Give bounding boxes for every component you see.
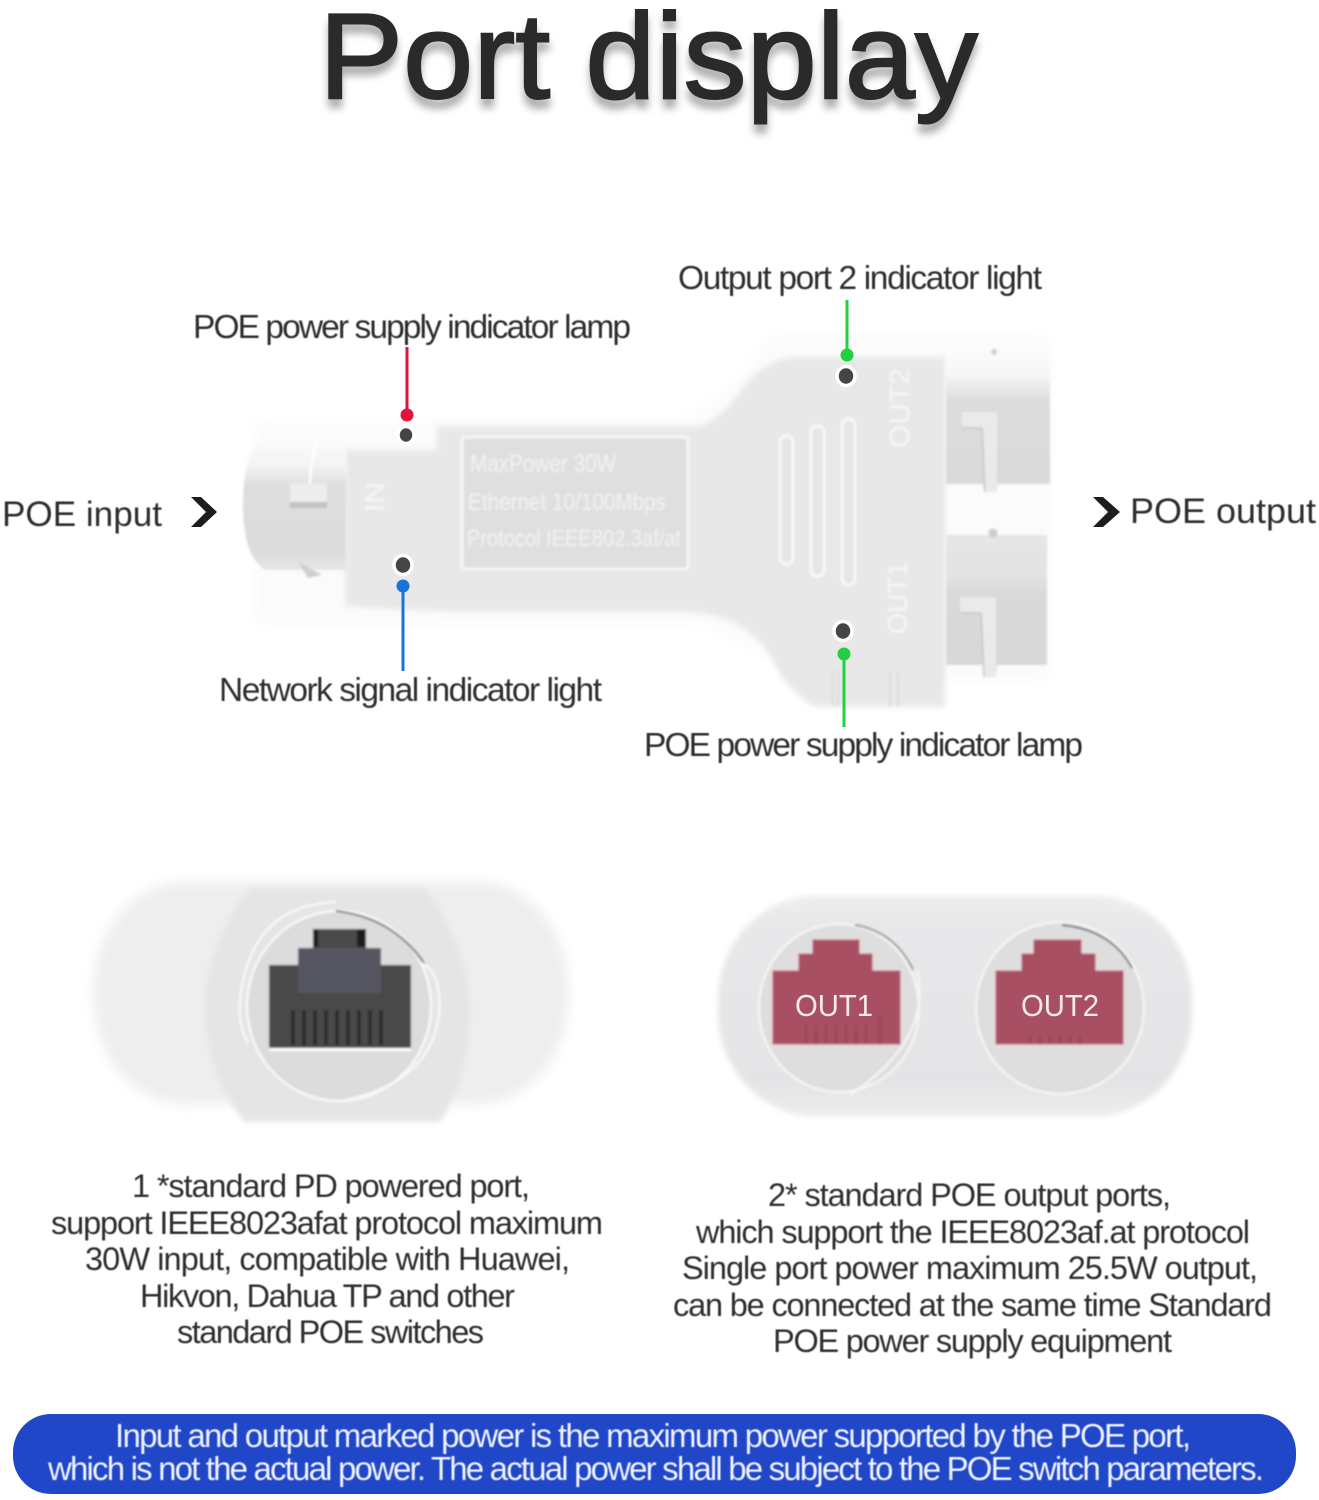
text block: input port description: Hikvon, Dahua TP and other — [140, 1278, 515, 1314]
text block: input port description — [51, 1168, 603, 1350]
OUT2 socket — [995, 939, 1124, 1045]
callout banner — [13, 1414, 1296, 1494]
connector clips — [962, 412, 997, 492]
arrow: input — [191, 497, 217, 527]
pointer: output port 2 light (green) — [840, 300, 854, 362]
label plate — [462, 437, 688, 569]
text block: input port description: 30W input, compatible with Huawei, — [85, 1241, 570, 1277]
rings — [759, 924, 919, 1092]
label: POE input: POE input — [2, 495, 162, 534]
plug clip — [290, 438, 327, 578]
left plug — [243, 438, 346, 570]
housing — [718, 895, 1192, 1117]
OUT1 label: OUT1 — [795, 988, 873, 1023]
device: PoE splitter top view — [243, 335, 1050, 707]
ring — [247, 911, 431, 1101]
text block: output ports description: Single port power maximum 25.5W output, — [682, 1250, 1258, 1286]
callout banner: which is not the actual power. The actual power shall be subject to the POE switch parameters. — [47, 1450, 1264, 1487]
callout banner: Input and output marked power is the maximum power supported by the POE port, — [115, 1417, 1191, 1454]
soft halo — [255, 335, 1050, 680]
text block: input port description: standard POE switches — [177, 1314, 484, 1350]
label plate: Protocol IEEE802.3af/at — [467, 525, 682, 551]
indicator LEDs — [394, 366, 855, 640]
label plate: MaxPower 30W — [470, 450, 616, 478]
connector dots — [988, 349, 998, 538]
pointer: network signal light (blue) — [396, 580, 410, 671]
label: network signal indicator light: Network signal indicator light — [219, 672, 603, 709]
label: POE output: POE output — [1130, 492, 1316, 531]
text block: output ports description: POE power supply equipment — [773, 1323, 1172, 1359]
front cap — [205, 888, 470, 1122]
label: output port 2 indicator light: Output port 2 indicator light — [678, 260, 1043, 297]
pointer: POE lamp output (green) — [838, 648, 850, 727]
ribs — [780, 419, 855, 585]
port marks: IN — [359, 482, 390, 512]
label: POE power supply indicator lamp (top): POE power supply indicator lamp — [193, 309, 631, 346]
main body — [345, 357, 945, 707]
text block: output ports description: can be connected at the same time Standard — [673, 1287, 1272, 1323]
label plate: Ethernet 10/100Mbps — [468, 489, 666, 516]
text block: input port description: 1 *standard PD powered port, — [132, 1168, 530, 1204]
rear housing — [94, 882, 568, 1104]
OUT1 socket — [772, 939, 901, 1045]
output ports end view — [718, 895, 1192, 1117]
bottom connector — [946, 535, 1047, 677]
port marks — [359, 368, 915, 634]
port marks: OUT2 — [884, 368, 915, 448]
text block: output ports description — [673, 1177, 1272, 1359]
text block: output ports description: which support the IEEE8023af.at protocol — [695, 1214, 1250, 1250]
input port end view — [94, 882, 568, 1122]
label: POE power supply indicator lamp (bottom): POE power supply indicator lamp — [644, 727, 1083, 764]
port marks: OUT1 — [882, 562, 913, 634]
grip lines — [833, 670, 898, 706]
text block: output ports description: 2* standard POE output ports, — [768, 1177, 1171, 1213]
top connector — [946, 345, 1050, 492]
OUT2 label: OUT2 — [1021, 988, 1099, 1023]
pointer: POE power supply lamp (red) — [400, 347, 414, 422]
RJ45 socket — [269, 929, 411, 1048]
text block: input port description: support IEEE8023afat protocol maximum — [51, 1205, 603, 1241]
arrow: output — [1093, 497, 1120, 527]
